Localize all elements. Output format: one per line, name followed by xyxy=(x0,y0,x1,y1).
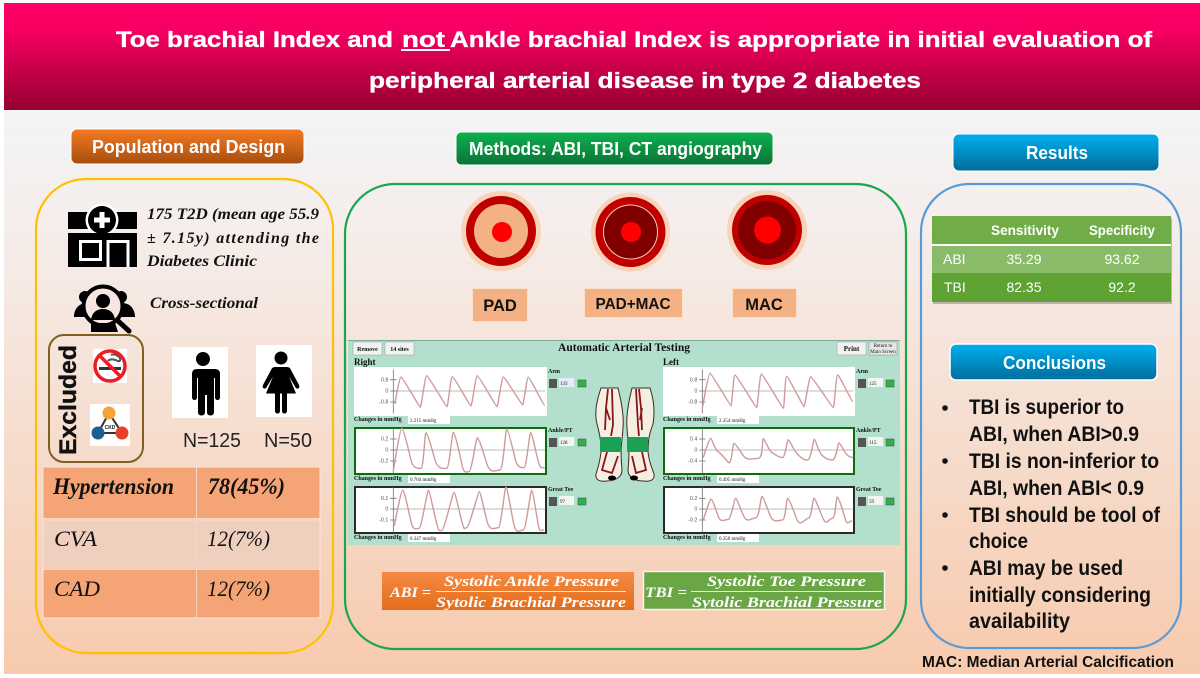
chart: right leg waveforms: 0.704 mmHg xyxy=(410,478,437,483)
table: comorbidities: Hypertension xyxy=(52,474,174,499)
table: sensitivity and specificity: 82.35 xyxy=(1006,279,1042,295)
chart: right leg waveforms: -0.8 xyxy=(379,400,388,406)
formula: TBI xyxy=(644,572,884,611)
footnote: abbreviation: MAC: Median Arterial Calcification xyxy=(922,654,1174,671)
text: conclusions list xyxy=(942,396,1161,633)
chart: left leg waveforms: Arm xyxy=(856,369,868,375)
chart: left leg waveforms: Ankle/PT xyxy=(856,428,881,434)
text: conclusions list: TBI is non-inferior to xyxy=(969,450,1159,473)
toolbar: 14 sites xyxy=(390,347,409,353)
chart: left leg waveforms: 0.4 xyxy=(690,437,697,443)
chart: right leg waveforms: 0.347 mmHg xyxy=(410,537,437,542)
text: conclusions list: initially considering xyxy=(969,584,1151,607)
chart: right leg waveforms: Changes in mmHg xyxy=(354,476,402,482)
toolbar: Return to xyxy=(874,344,893,349)
formula: TBI: Systolic Toe Pressure xyxy=(707,574,866,590)
text: participants: Diabetes Clinic xyxy=(146,253,257,270)
formula: TBI: Sytolic Brachial Pressure xyxy=(692,595,882,611)
table: comorbidities xyxy=(43,467,320,618)
title banner: Toe brachial Index and xyxy=(116,27,393,52)
heading: Results: Results xyxy=(1026,143,1088,163)
formula: ABI: Sytolic Brachial Pressure xyxy=(436,595,626,611)
icon: man xyxy=(172,347,228,418)
text: conclusions list: ABI may be used xyxy=(969,557,1123,580)
icon: hospital xyxy=(68,204,137,267)
chart: right leg waveforms xyxy=(354,357,586,542)
title banner: not xyxy=(402,27,446,52)
formula: ABI: ABI = xyxy=(389,585,431,601)
chart: left leg waveforms: 0.495 mmHg xyxy=(719,478,746,483)
chart: left leg waveforms xyxy=(663,357,894,542)
chart: left leg waveforms: Changes in mmHg xyxy=(663,476,711,482)
chart: right leg waveforms: Changes in mmHg xyxy=(354,535,402,541)
heading: Conclusions: Conclusions xyxy=(1003,353,1106,373)
heading: Population and Design: Population and Design xyxy=(92,137,285,157)
chart: right leg waveforms: Ankle/PT xyxy=(548,428,573,434)
toolbar xyxy=(353,342,897,355)
text: conclusions list: TBI should be tool of xyxy=(969,504,1161,527)
screenshot: automatic arterial testing xyxy=(348,340,900,545)
panel: results and conclusions xyxy=(921,184,1181,648)
chart: left leg waveforms: Left xyxy=(663,357,679,367)
chart: right leg waveforms: Great Toe xyxy=(548,487,574,493)
icon: no smoking xyxy=(93,349,127,383)
chart: right leg waveforms: 0.1 xyxy=(381,496,388,502)
formula: ABI xyxy=(382,572,634,611)
chart: right leg waveforms: -0.1 xyxy=(379,518,388,524)
table: comorbidities: CVA xyxy=(54,526,98,551)
chart: right leg waveforms: Right xyxy=(354,357,376,367)
text: participants: ± 7.15y) attending the xyxy=(147,230,319,247)
title banner: peripheral arterial disease in type 2 diabetes xyxy=(369,68,921,93)
illustration: legs with cuffs xyxy=(596,388,654,481)
chart: left leg waveforms: -0.4 xyxy=(688,459,697,465)
chart: left leg waveforms: -0.2 xyxy=(688,518,697,524)
text: participants: 175 T2D (mean age 55.9 xyxy=(147,206,319,223)
chart: right leg waveforms: 2.215 mmHg xyxy=(410,419,437,424)
table: comorbidities: 12(7%) xyxy=(207,526,270,551)
formula: TBI: TBI = xyxy=(645,585,687,601)
chart: right leg waveforms: 0 xyxy=(385,389,388,395)
text: study design: Cross-sectional xyxy=(150,295,259,312)
label: PAD xyxy=(472,288,528,322)
chart: left leg waveforms: 59 xyxy=(869,500,874,505)
table: sensitivity and specificity: TBI xyxy=(944,279,966,295)
chart: left leg waveforms: 115 xyxy=(869,441,877,446)
chart: left leg waveforms: 0 xyxy=(694,507,697,513)
text: conclusions list: choice xyxy=(969,530,1028,553)
heading: Methods: Methods: ABI, TBI, CT angiography xyxy=(469,139,762,159)
toolbar: Automatic Arterial Testing xyxy=(558,342,690,354)
heading: Methods xyxy=(456,132,773,165)
chart: right leg waveforms: 0 xyxy=(385,507,388,513)
table: sensitivity and specificity: ABI xyxy=(943,251,966,267)
chart: right leg waveforms: 128 xyxy=(560,441,568,446)
label: PAD: PAD xyxy=(483,297,517,315)
label: PAD+MAC xyxy=(584,288,682,318)
table: sensitivity and specificity xyxy=(932,216,1172,304)
text: conclusions list: TBI is superior to xyxy=(969,396,1124,419)
chart: right leg waveforms: 97 xyxy=(560,500,566,505)
table: sensitivity and specificity: 92.2 xyxy=(1108,279,1136,295)
chart: left leg waveforms: Changes in mmHg xyxy=(663,417,711,423)
title banner: Ankle brachial Index is appropriate in initial evaluation of xyxy=(450,27,1153,52)
chart: left leg waveforms: 2.354 mmHg xyxy=(719,419,746,424)
chart: right leg waveforms: 0.2 xyxy=(381,437,388,443)
table: sensitivity and specificity: 93.62 xyxy=(1104,251,1140,267)
icon: CKD triangle: CKD xyxy=(105,425,116,431)
diagram: PAD artery xyxy=(461,191,541,271)
heading: Results xyxy=(953,134,1159,171)
chart: left leg waveforms: 0.350 mmHg xyxy=(719,537,746,542)
chart: left leg waveforms: -0.8 xyxy=(688,400,697,406)
icon: woman xyxy=(256,345,312,417)
heading: Population and Design xyxy=(71,129,304,164)
title banner xyxy=(4,3,1200,110)
chart: left leg waveforms: 0 xyxy=(694,389,697,395)
label: N=50: N=50 xyxy=(264,430,312,452)
chart: right leg waveforms: -0.2 xyxy=(379,459,388,465)
chart: right leg waveforms: Changes in mmHg xyxy=(354,417,402,423)
chart: right leg waveforms: 0 xyxy=(385,448,388,454)
heading: Conclusions xyxy=(950,344,1157,380)
toolbar: Print xyxy=(844,345,860,353)
toolbar: Main Screen xyxy=(870,350,896,355)
panel: methods xyxy=(345,184,906,649)
table: comorbidities: 78(45%) xyxy=(208,474,285,499)
table: comorbidities: CAD xyxy=(54,576,100,601)
text: conclusions list: ABI, when ABI< 0.9 xyxy=(969,477,1144,500)
table: sensitivity and specificity: Sensitivity xyxy=(991,222,1059,238)
diagram: PAD+MAC artery xyxy=(591,192,670,272)
label: excluded: Excluded xyxy=(55,345,82,455)
chart: left leg waveforms: 0.2 xyxy=(690,496,697,502)
table: sensitivity and specificity: Specificity xyxy=(1089,222,1155,238)
chart: left leg waveforms: 0.8 xyxy=(690,377,697,383)
chart: left leg waveforms: Great Toe xyxy=(856,487,882,493)
text: conclusions list: availability xyxy=(969,610,1070,633)
label: MAC: MAC xyxy=(745,296,783,314)
diagram: MAC artery xyxy=(727,190,807,270)
label: MAC xyxy=(732,288,796,318)
text: conclusions list: ABI, when ABI>0.9 xyxy=(969,423,1139,446)
table: comorbidities: 12(7%) xyxy=(207,576,270,601)
label: PAD+MAC: PAD+MAC xyxy=(596,296,671,313)
chart: left leg waveforms: Changes in mmHg xyxy=(663,535,711,541)
label: N=125: N=125 xyxy=(183,430,241,452)
icon: people search xyxy=(74,285,135,332)
chart: right leg waveforms: Arm xyxy=(548,369,560,375)
chart: left leg waveforms: 125 xyxy=(869,382,877,387)
chart: left leg waveforms: 0 xyxy=(694,448,697,454)
group: excluded xyxy=(49,335,143,462)
table: sensitivity and specificity: 35.29 xyxy=(1006,251,1042,267)
chart: right leg waveforms: 0.8 xyxy=(381,377,388,383)
chart: right leg waveforms: 133 xyxy=(560,382,568,387)
panel: population and design xyxy=(36,179,333,653)
text: participants xyxy=(146,206,319,270)
toolbar: Remove xyxy=(357,347,378,353)
formula: ABI: Systolic Ankle Pressure xyxy=(444,574,619,590)
